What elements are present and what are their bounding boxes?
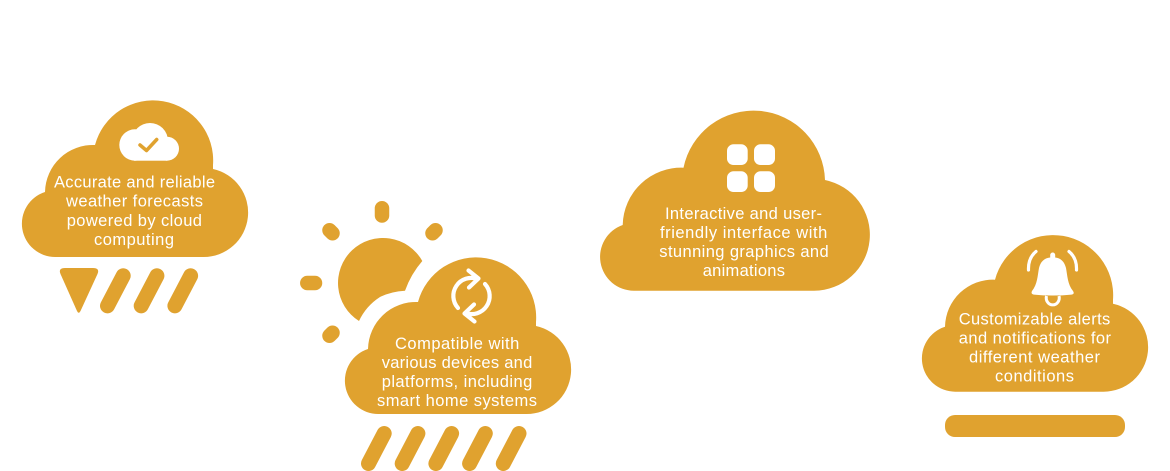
icon: rain streaks <box>368 434 519 464</box>
panel: interface <box>600 111 870 291</box>
cloud shape: alerts <box>922 235 1148 392</box>
text: accurate forecasts: Accurate and reliable <box>54 174 215 192</box>
text: compatibility: Compatible with <box>395 335 519 353</box>
icon: sun <box>307 208 436 336</box>
panel: alerts <box>922 235 1148 437</box>
text: alerts: Customizable alerts <box>959 310 1110 328</box>
cloud shape: compatibility <box>345 257 571 414</box>
cloud shape: accurate forecasts <box>22 100 248 257</box>
text: compatibility: platforms, including <box>382 373 532 391</box>
text: compatibility: smart home systems <box>377 392 537 410</box>
text: interface: stunning graphics and <box>659 243 829 261</box>
text: alerts: and notifications for <box>959 329 1112 347</box>
icon: sync arrows <box>453 270 490 322</box>
text: interface: Interactive and user- <box>665 205 822 223</box>
text: interface: animations <box>703 262 785 280</box>
panel: compatibility <box>307 208 571 464</box>
text: accurate forecasts: weather forecasts <box>65 193 203 211</box>
icon: bell <box>1028 252 1077 305</box>
text: interface: friendly interface with <box>660 224 827 242</box>
panel: accurate forecasts <box>22 100 248 313</box>
cloud shape: interface <box>600 111 870 291</box>
text: alerts: conditions <box>995 368 1074 386</box>
text: accurate forecasts: powered by cloud <box>67 212 202 230</box>
icon: hail triangle <box>60 268 98 313</box>
text: alerts: different weather <box>969 348 1100 366</box>
text: compatibility: various devices and <box>382 354 532 372</box>
icon: rain streaks <box>108 276 191 306</box>
text: accurate forecasts: computing <box>94 231 174 249</box>
icon: app grid <box>727 144 775 192</box>
icon: cloud with check mark <box>119 123 179 161</box>
bar: ground line <box>945 415 1125 437</box>
